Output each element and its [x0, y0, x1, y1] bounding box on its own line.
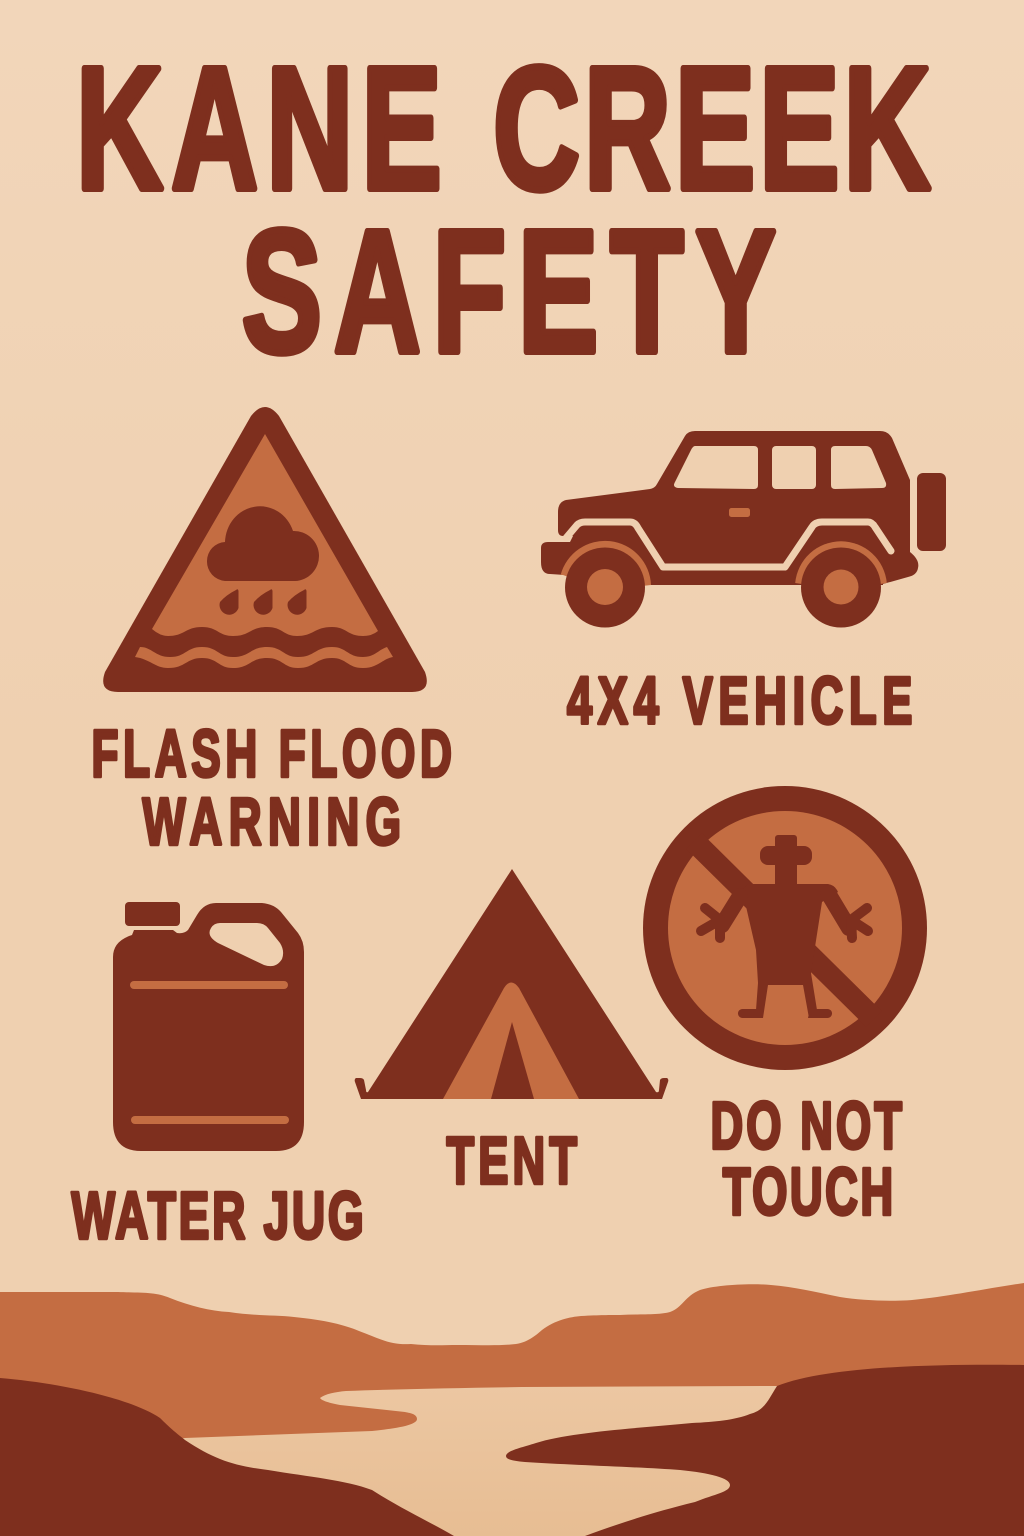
label: do not touch [710, 1090, 905, 1230]
title: SAFETY [242, 194, 788, 388]
label: do not touch: TOUCH [723, 1156, 896, 1230]
panel: tent [355, 869, 668, 1198]
label: tent: TENT [446, 1124, 581, 1198]
label: flash flood warning: FLASH FLOOD [92, 718, 456, 792]
icon: flash flood warning triangle [103, 407, 427, 692]
creek [170, 1386, 790, 1536]
icon: water jug [113, 902, 304, 1151]
label: water jug: WATER JUG [72, 1180, 366, 1254]
panel: water jug [72, 902, 366, 1254]
foreground right bank [506, 1365, 1024, 1536]
title: KANE [76, 30, 450, 226]
panel: 4x4 vehicle [541, 431, 946, 738]
label: do not touch: DO NOT [710, 1090, 905, 1164]
icon: tent [355, 869, 668, 1099]
landscape: canyon and creek [0, 1283, 1024, 1536]
mid-ground orange mesas [0, 1283, 1024, 1450]
title [76, 30, 934, 388]
icon: do not touch prohibition sign [643, 786, 927, 1070]
panel: do not touch [643, 786, 927, 1230]
panel: flash flood warning [92, 407, 456, 860]
foreground left bank [0, 1378, 454, 1536]
icon: 4x4 vehicle [541, 431, 946, 628]
figure: petroglyph [701, 835, 868, 1018]
label: flash flood warning: WARNING [142, 786, 408, 860]
label: flash flood warning [92, 718, 456, 860]
